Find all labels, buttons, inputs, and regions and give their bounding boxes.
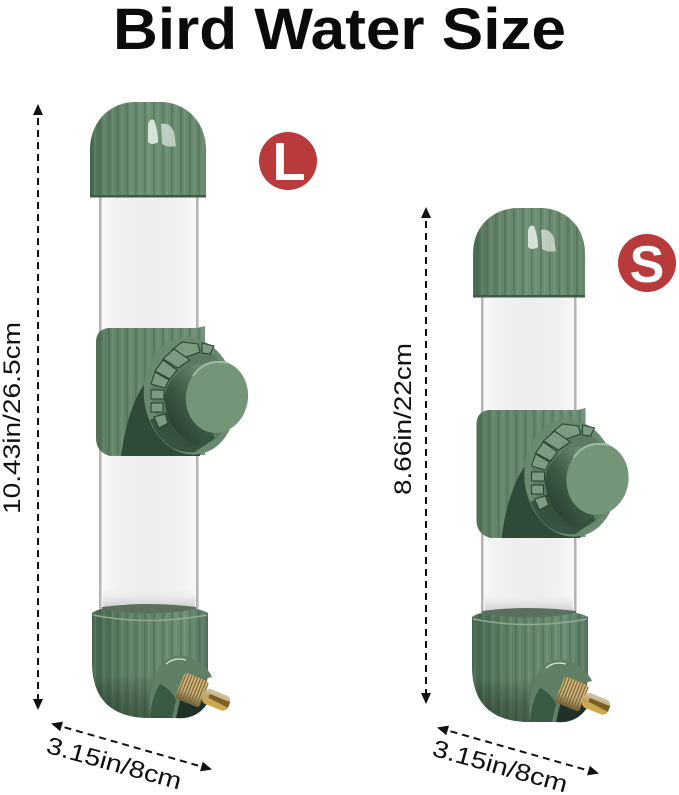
tube: small	[481, 290, 577, 620]
valve hub and knob: large	[96, 326, 253, 461]
base and nozzle: large	[92, 604, 234, 718]
size badge: L	[259, 132, 317, 192]
width dimension: small: 3.15in/8cm	[429, 735, 571, 795]
size badge: S: S	[630, 236, 664, 294]
width dimension: small	[429, 728, 597, 795]
width dimension: large: 3.15in/8cm	[43, 732, 185, 795]
size badge: S	[618, 234, 676, 294]
bottle: small	[472, 208, 633, 722]
size badge: L: L	[272, 132, 306, 192]
height dimension: small: 8.66in/22cm	[390, 343, 417, 495]
cap: small	[473, 208, 585, 298]
bottle: large	[90, 102, 253, 718]
base and nozzle: small	[472, 608, 614, 722]
valve hub and knob: small	[476, 408, 633, 543]
cap: large	[90, 102, 206, 198]
width dimension: large	[43, 724, 210, 795]
tube: large	[99, 190, 199, 615]
